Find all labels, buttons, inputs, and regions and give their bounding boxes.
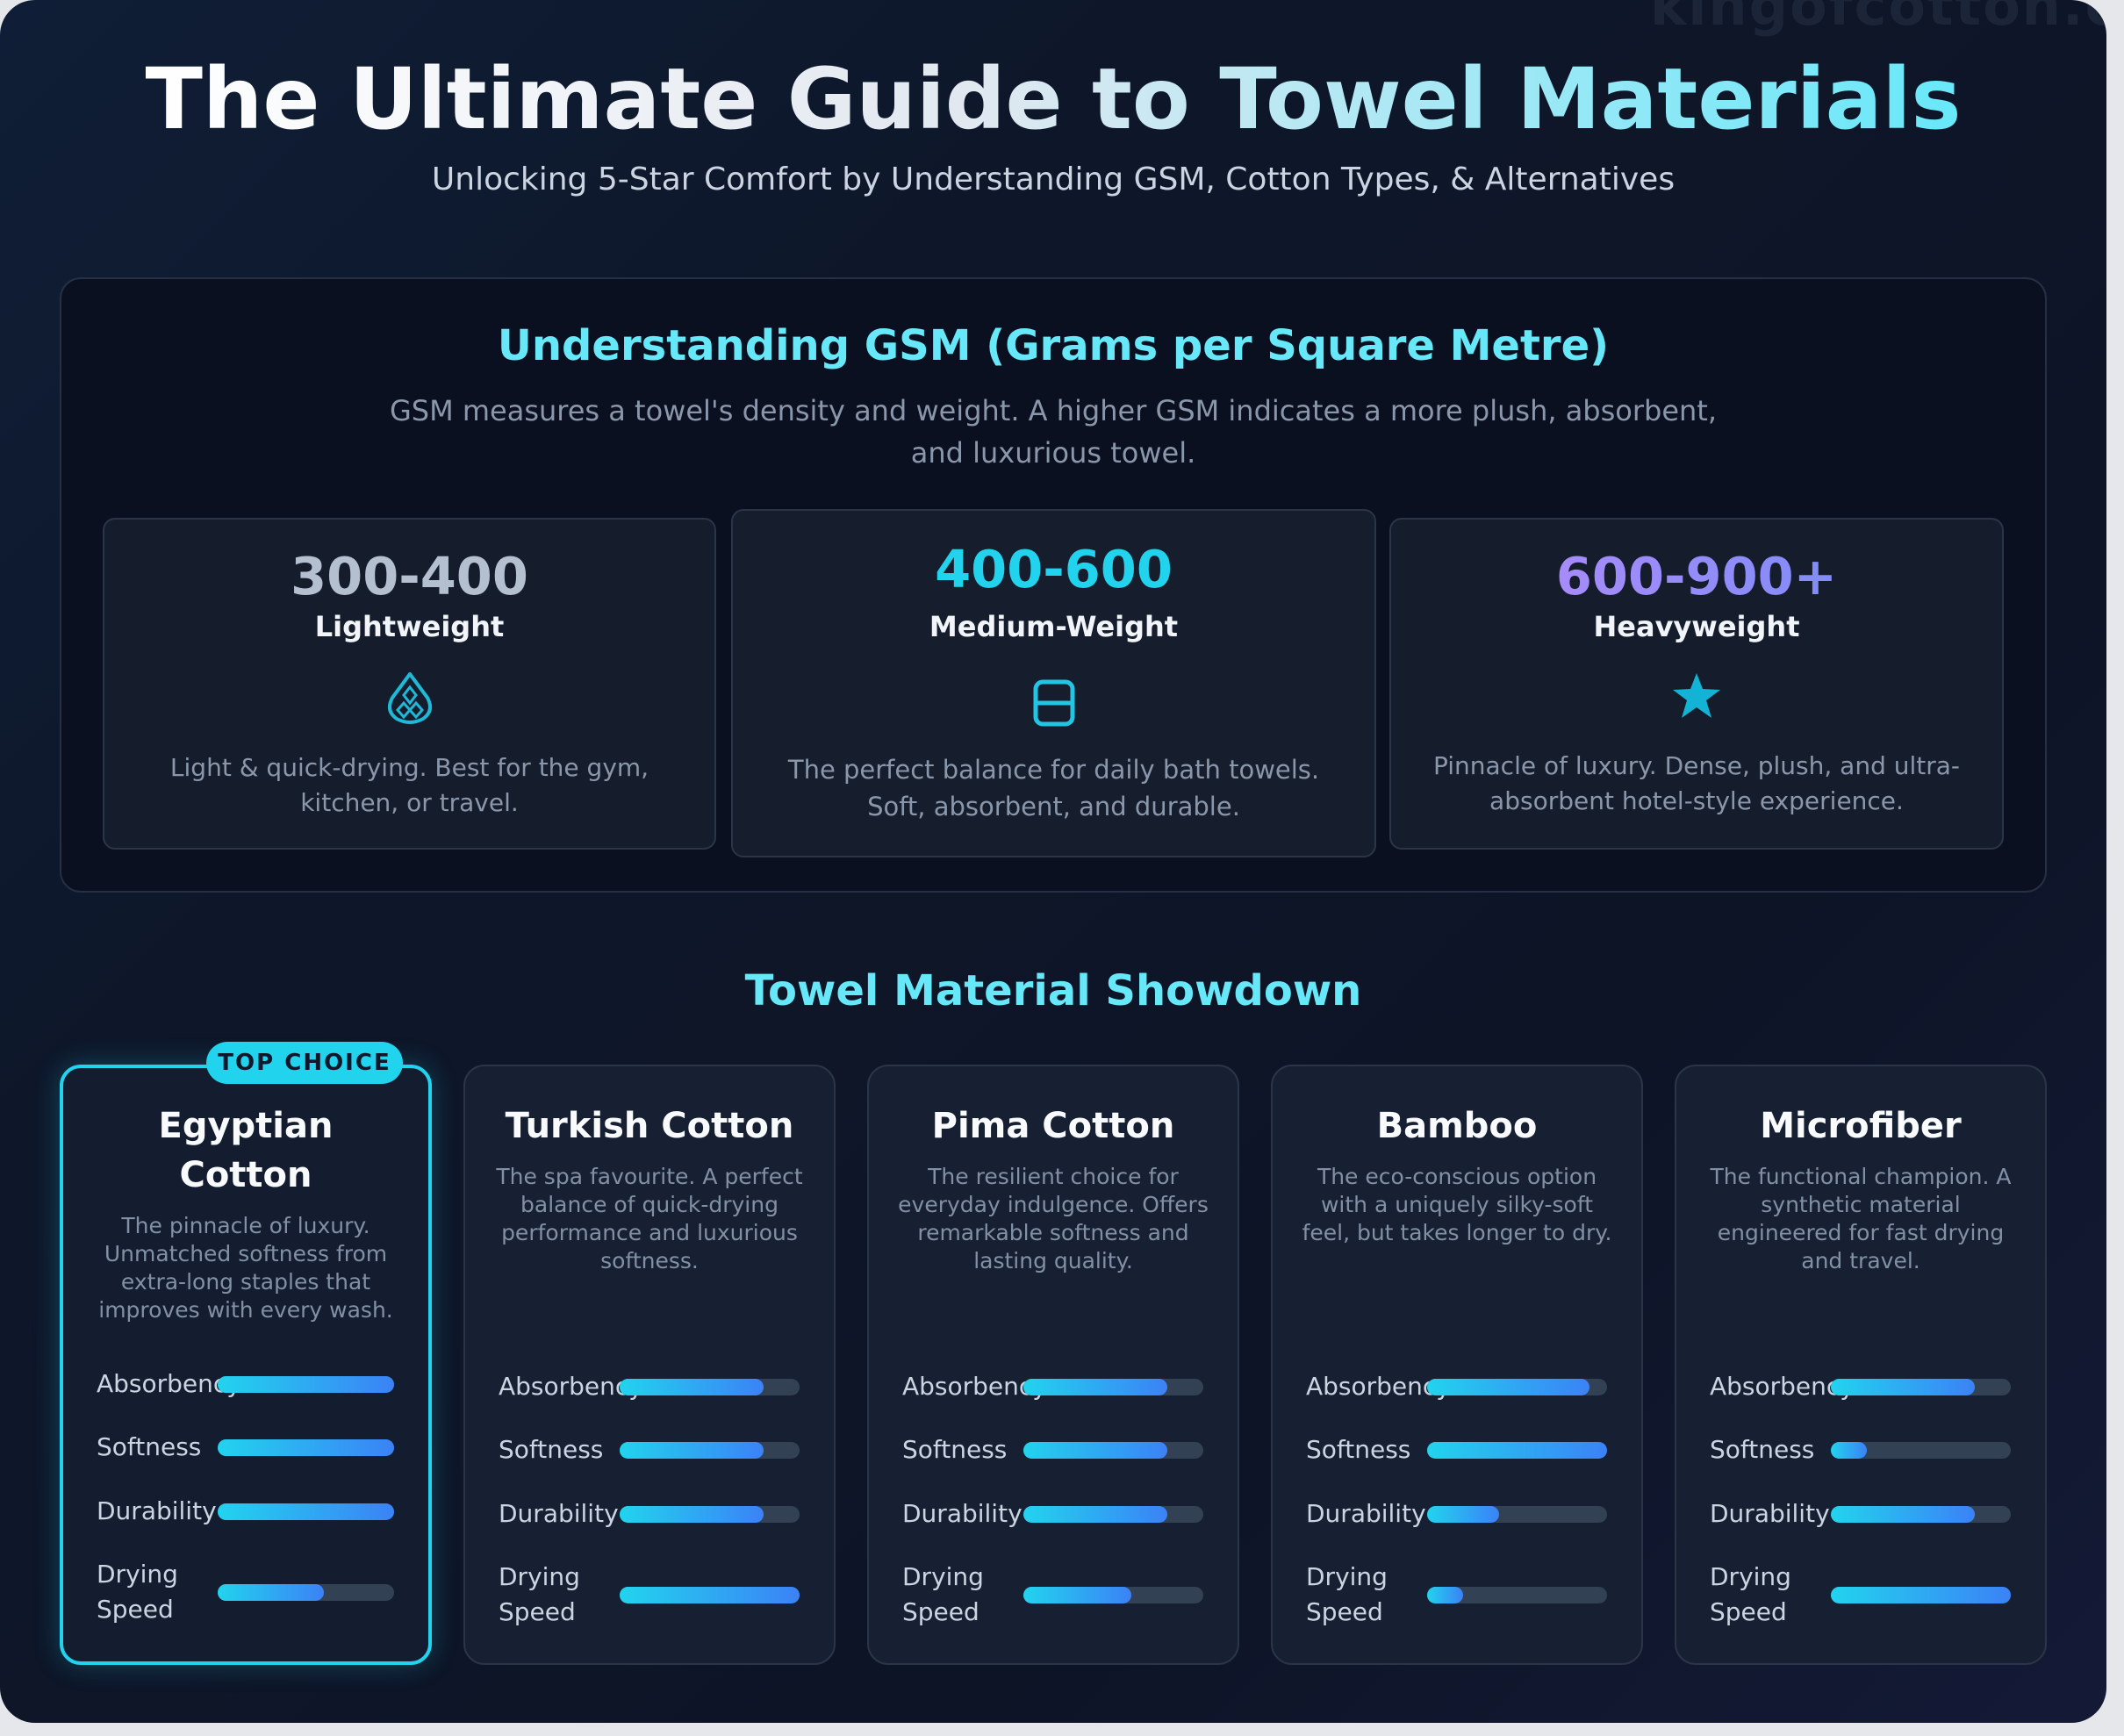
material card: Microfiber: Speed [1710, 1597, 1787, 1626]
material card: Turkish: The spa favourite. A perfect balance of quick-drying performance and luxurious softness. [496, 1164, 803, 1273]
material card: Microfiber: The functional champion. A synthetic material engineered for fast drying and travel. [1710, 1164, 2012, 1273]
material card: Turkish: Durability [499, 1499, 619, 1528]
badge [206, 1042, 403, 1084]
material card: Bamboo [1271, 1065, 1643, 1665]
icon: drop [388, 672, 432, 724]
GSM card: heavyweight: 600-900+ [1556, 546, 1837, 606]
material card: Egyptian: Durability [97, 1496, 217, 1525]
GSM card: lightweight [103, 518, 716, 850]
material card: Egyptian: Speed [97, 1595, 174, 1624]
icon: towel [1034, 679, 1074, 727]
material card: Bamboo: Speed [1306, 1597, 1383, 1626]
GSM card: medium: Soft, absorbent, and durable. [867, 792, 1240, 821]
material card: Turkish: Absorbency [499, 1372, 643, 1401]
material card: Pima [867, 1065, 1239, 1665]
GSM card: medium: The perfect balance for daily bath towels. [788, 755, 1319, 785]
GSM card: medium [731, 509, 1376, 857]
badge: TOP CHOICE [218, 1050, 391, 1076]
material card: Turkish: Speed [499, 1597, 576, 1626]
material card: Pima: Drying [902, 1562, 984, 1591]
subtitle: Unlocking 5-Star Comfort by Understanding GSM, Cotton Types, & Alternatives [432, 161, 1675, 197]
panel: GSM [60, 277, 2047, 893]
material card: Bamboo: Durability [1306, 1499, 1426, 1528]
GSM card: heavyweight: Pinnacle of luxury. Dense, plush, and ultra- [1433, 751, 1960, 780]
material card: Egyptian: Drying [97, 1560, 178, 1589]
GSM card: heavyweight: Heavyweight [1593, 610, 1799, 643]
material card: Bamboo: Bamboo [1377, 1106, 1537, 1146]
material card: Bamboo: Softness [1306, 1435, 1410, 1464]
material card: Pima: Pima Cotton [932, 1106, 1174, 1146]
icon: star [1673, 673, 1720, 718]
material card: Pima: Speed [902, 1597, 979, 1626]
material card: Bamboo: Absorbency [1306, 1372, 1451, 1401]
material card: Microfiber: Absorbency [1710, 1372, 1855, 1401]
GSM card: heavyweight [1389, 518, 2004, 850]
material card: Microfiber: Drying [1710, 1562, 1791, 1591]
material card: Bamboo: The eco-conscious option with a uniquely silky-soft feel, but takes longer to dry. [1302, 1164, 1611, 1245]
material card: Bamboo: Drying [1306, 1562, 1388, 1591]
material card: Pima: Softness [902, 1435, 1007, 1464]
material card: Egyptian: Softness [97, 1432, 201, 1461]
GSM card: medium: Medium-Weight [929, 610, 1178, 643]
material card: Egyptian: Cotton [179, 1155, 312, 1195]
GSM card: lightweight: 300-400 [291, 546, 528, 606]
GSM description: GSM measures a towel's density and weight. A higher GSM indicates a more plush, absorbent, and luxurious towel. [390, 394, 1717, 470]
material card: Microfiber [1675, 1065, 2047, 1665]
material card: Microfiber: Durability [1710, 1499, 1830, 1528]
GSM card: lightweight: Lightweight [315, 610, 504, 643]
material card: Turkish: Softness [499, 1435, 603, 1464]
material card: Turkish: Turkish Cotton [506, 1106, 793, 1146]
material card: Turkish [463, 1065, 836, 1665]
title: The Ultimate Guide to Towel Materials [145, 50, 1961, 148]
GSM card: lightweight: kitchen, or travel. [300, 788, 519, 817]
material card: Egyptian: Egyptian [159, 1106, 333, 1146]
showdown heading: Towel Material Showdown [745, 966, 1361, 1015]
GSM card: lightweight: Light & quick-drying. Best for the gym, [170, 753, 649, 782]
material card: Egyptian: The pinnacle of luxury. Unmatched softness from extra-long staples that improves with every wash. [98, 1213, 393, 1323]
material card: Pima: Absorbency [902, 1372, 1047, 1401]
GSM card: medium: 400-600 [935, 539, 1173, 599]
material card: Microfiber: Microfiber [1760, 1106, 1962, 1146]
material card: Egyptian [60, 1065, 432, 1665]
material card: Turkish: Drying [499, 1562, 580, 1591]
material card: Pima: The resilient choice for everyday indulgence. Offers remarkable softness and lasting quality. [898, 1164, 1209, 1273]
material card: Pima: Durability [902, 1499, 1023, 1528]
material card: Microfiber: Softness [1710, 1435, 1814, 1464]
GSM card: heavyweight: absorbent hotel-style experience. [1489, 786, 1904, 815]
material card: Egyptian: Absorbency [97, 1369, 241, 1398]
GSM heading: Understanding GSM (Grams per Square Metre) [498, 321, 1609, 370]
